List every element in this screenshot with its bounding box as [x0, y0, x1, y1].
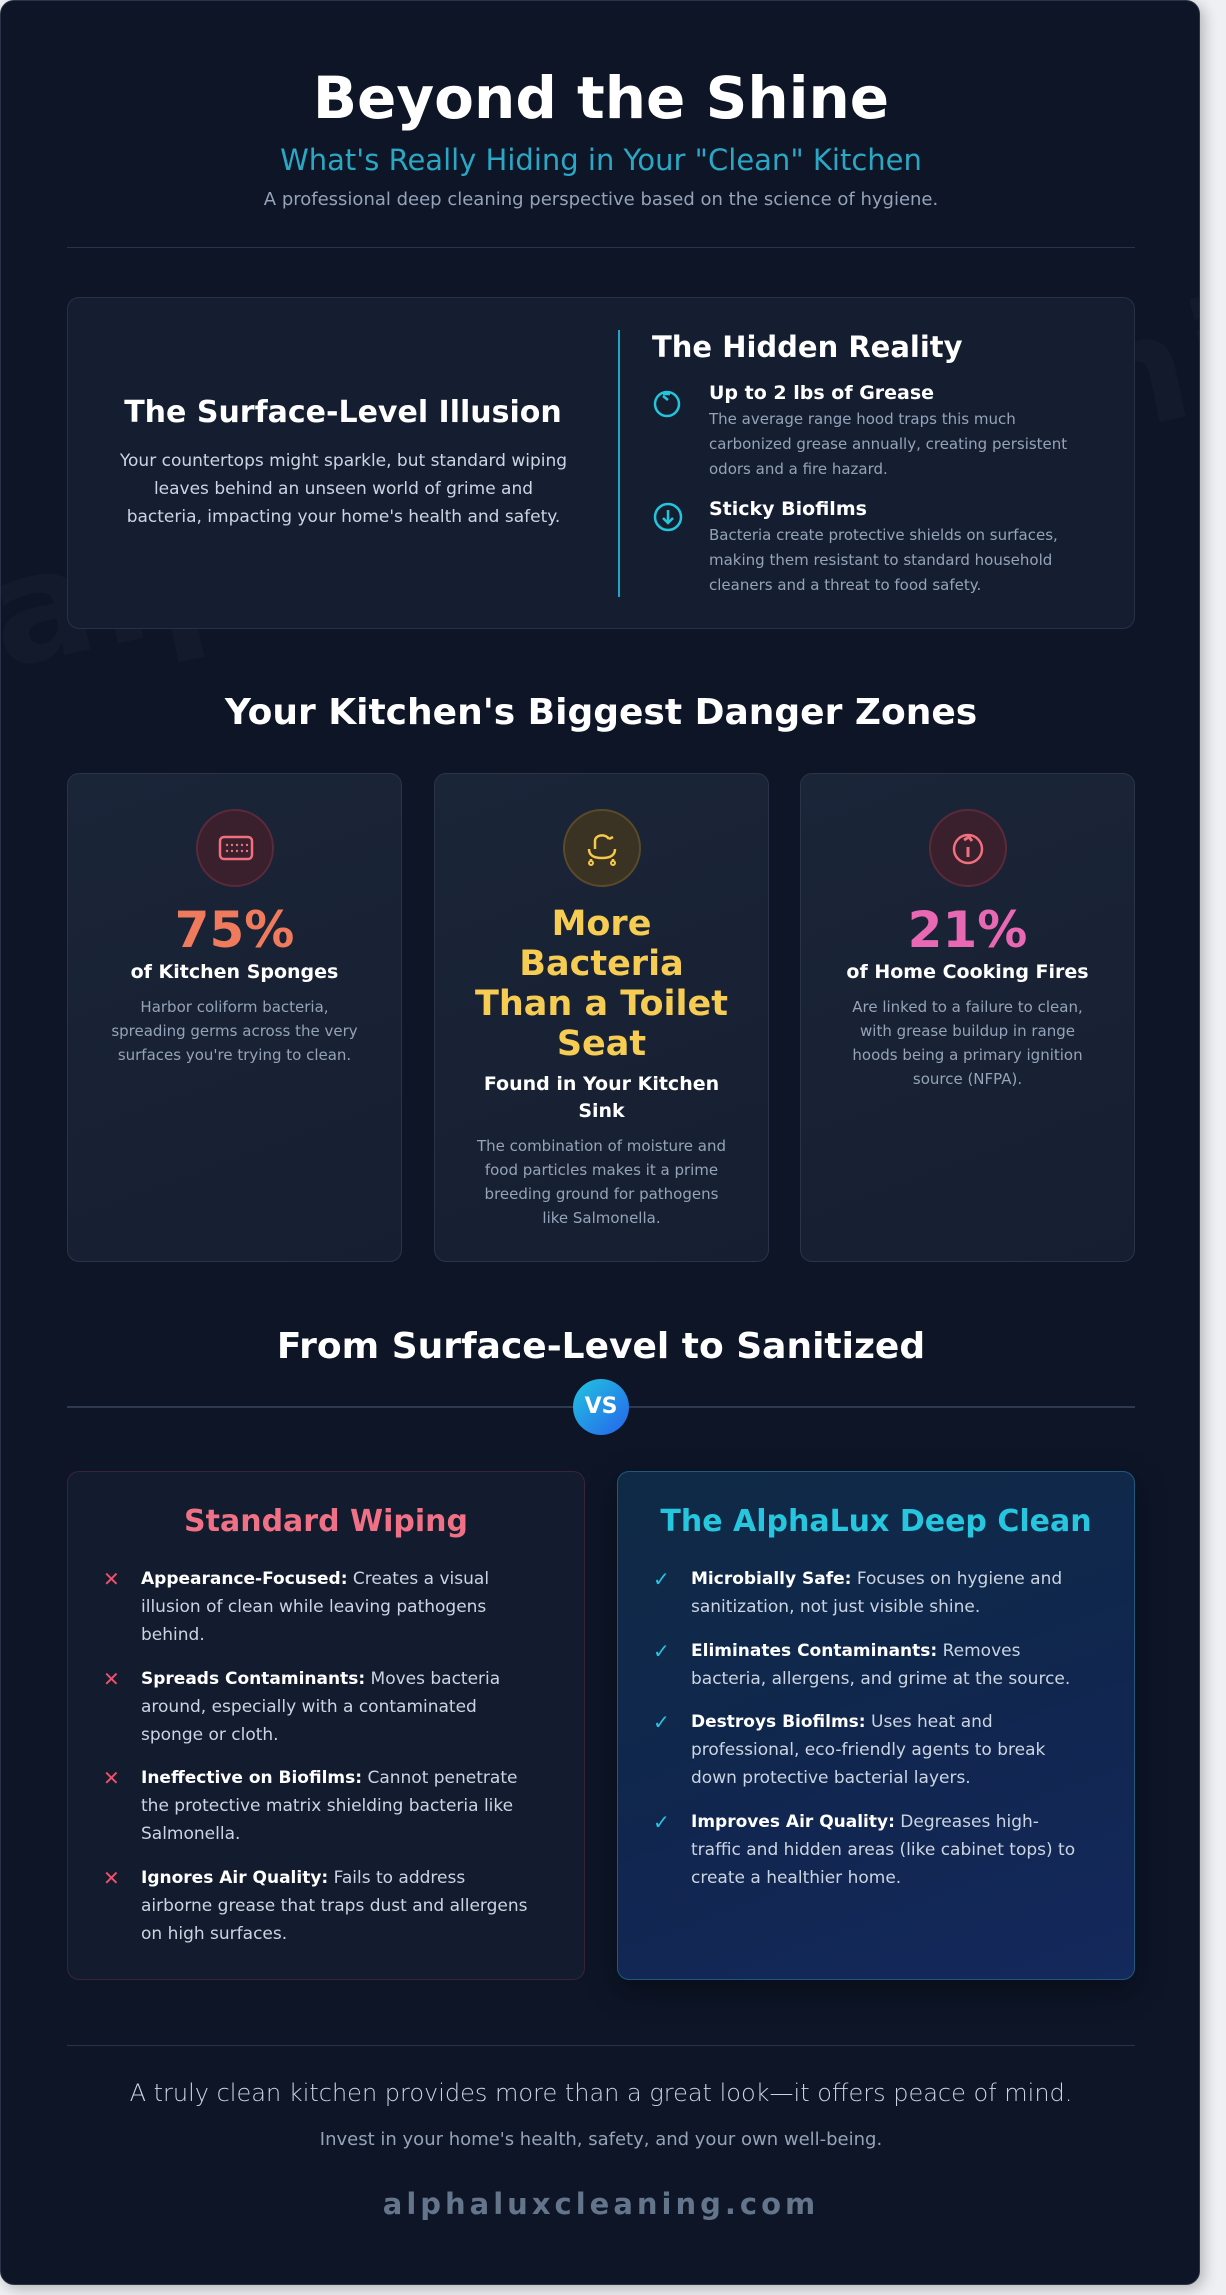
stat: 75%: 75%: [175, 901, 294, 959]
heading: comparison: From Surface-Level to Sanitized: [277, 1326, 925, 1367]
item: biofilms: Bacteria create protective shields on surfaces, making them resistant to standard household cleaners and a threat to food safety.: [709, 526, 1058, 594]
item: Destroys Biofilms: Uses heat and professional, eco-friendly agents to break down protective bacterial layers.: [691, 1712, 1045, 1788]
panel: standard wiping: ✕: [103, 1667, 120, 1691]
item: [653, 1810, 1075, 1888]
item: grease: Up to 2 lbs of Grease: [709, 382, 934, 404]
card: sponges: [67, 773, 402, 1262]
icon: down arrow circle: [654, 502, 682, 532]
text: illusion body: Your countertops might sparkle, but standard wiping leaves behind an unseen world of grime and bacteria, impacting your home's health and safety.: [120, 451, 567, 527]
panel: alphalux deep clean: ✓: [653, 1710, 670, 1734]
item: create a healthier home.: [691, 1868, 901, 1888]
icon: fire: [929, 809, 1007, 887]
stat: more bacteria: More: [552, 904, 651, 944]
icon: sink: [563, 809, 641, 887]
description: Are linked to a failure to clean, with grease buildup in range hoods being a primary ignition source (NFPA).: [852, 998, 1083, 1088]
item: Improves Air Quality: Degreases high-: [691, 1812, 1039, 1832]
item: biofilms: [654, 498, 1058, 594]
item: Spreads Contaminants: Moves bacteria around, especially with a contaminated sponge or cloth.: [141, 1669, 500, 1745]
panel: alphalux deep clean: ✓: [653, 1810, 670, 1834]
panel: alphalux deep clean: ✓: [653, 1639, 670, 1663]
stat: more bacteria: Than a Toilet: [475, 984, 728, 1024]
item: Ignores Air Quality: Fails to address airborne grease that traps dust and allergens on high surfaces.: [141, 1868, 527, 1944]
panel: alphalux deep clean: ✓: [653, 1567, 670, 1591]
panel: alphalux deep clean: [617, 1471, 1135, 1980]
stat: 21%: 21%: [908, 901, 1027, 959]
closing subtext: Invest in your home's health, safety, and your own well-being.: [320, 2129, 882, 2150]
badge: VS: [573, 1379, 629, 1435]
stat: more bacteria: [475, 904, 728, 1064]
label: of Home Cooking Fires: [846, 961, 1089, 983]
item: traffic and hidden areas (like cabinet tops) to: [691, 1840, 1075, 1860]
heading: Standard Wiping: [184, 1504, 468, 1539]
card: sink: [434, 773, 769, 1262]
item: biofilms: Sticky Biofilms: [709, 498, 867, 520]
icon: gauge: [654, 390, 680, 418]
item: Ineffective on Biofilms: Cannot penetrate the protective matrix shielding bacteria like Salmonella.: [141, 1768, 517, 1844]
closing quote: A truly clean kitchen provides more than a great look—it offers peace of mind.: [130, 2079, 1072, 2107]
description: The combination of moisture and food particles makes it a prime breeding ground for pathogens like Salmonella.: [477, 1137, 726, 1227]
heading: The AlphaLux Deep Clean: [660, 1504, 1092, 1539]
panel: standard wiping: ✕: [103, 1567, 120, 1591]
subtitle: What's Really Hiding in Your "Clean" Kitchen: [280, 143, 922, 177]
stat: more bacteria: Seat: [557, 1024, 646, 1064]
item: Microbially Safe: Focuses on hygiene and sanitization, not just visible shine.: [691, 1569, 1062, 1617]
label: Found in Your Kitchen Sink: [484, 1073, 719, 1122]
item: Appearance-Focused: Creates a visual illusion of clean while leaving pathogens behind.: [141, 1569, 489, 1645]
panel: standard wiping: ✕: [103, 1766, 120, 1790]
panel: standard wiping: [67, 1471, 585, 1980]
item: grease: [654, 382, 1067, 478]
title: Beyond the Shine: [313, 64, 889, 132]
tagline: A professional deep cleaning perspective based on the science of hygiene.: [264, 189, 938, 210]
panel: standard wiping: ✕: [103, 1866, 120, 1890]
panel: intro: [67, 297, 1135, 629]
heading: hidden reality: The Hidden Reality: [652, 330, 963, 364]
heading: danger zones: Your Kitchen's Biggest Danger Zones: [225, 692, 977, 733]
item: Eliminates Contaminants: Removes bacteria, allergens, and grime at the source.: [691, 1641, 1070, 1689]
description: Harbor coliform bacteria, spreading germs across the very surfaces you're trying to clean.: [111, 998, 358, 1064]
icon: sponge: [196, 809, 274, 887]
heading: surface-level illusion: The Surface-Level Illusion: [124, 395, 562, 430]
badge: VS: VS: [585, 1394, 617, 1419]
item: grease: The average range hood traps this much carbonized grease annually, creating persistent odors and a fire hazard.: [709, 410, 1067, 478]
card: fires: [800, 773, 1135, 1262]
stat: more bacteria: Bacteria: [519, 944, 684, 984]
label: of Kitchen Sponges: [131, 961, 338, 983]
website url: alphaluxcleaning.com: [383, 2187, 819, 2221]
